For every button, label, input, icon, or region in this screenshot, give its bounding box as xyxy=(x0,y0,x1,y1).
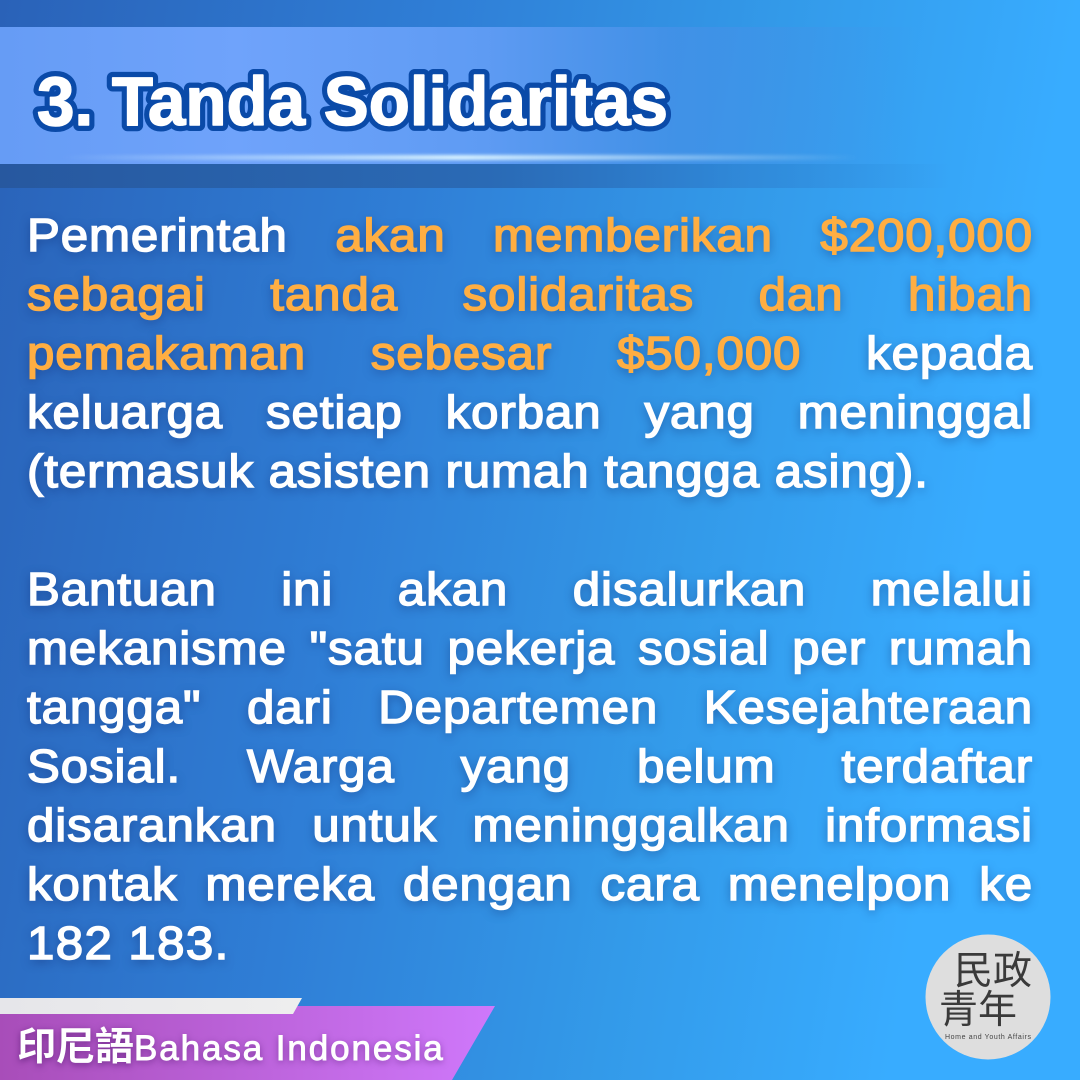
logo badge: Home and Youth Affairs xyxy=(945,1034,1032,1041)
body paragraph 2: Bantuan ini akan disalurkan melalui xyxy=(27,563,1033,615)
body paragraph 2: kontak mereka dengan cara menelpon ke xyxy=(27,858,1033,910)
logo badge: 民政 xyxy=(954,940,1032,996)
body paragraph 1: (termasuk asisten rumah tangga asing). xyxy=(27,445,929,497)
body paragraph 1: sebagai tanda solidaritas dan hibah xyxy=(27,268,1033,320)
title: 3. Tanda Solidaritas xyxy=(37,63,668,140)
body paragraph 2 xyxy=(26,563,1034,969)
body paragraph 2: tangga" dari Departemen Kesejahteraan xyxy=(27,681,1033,733)
body paragraph 2: mekanisme "satu pekerja sosial per rumah xyxy=(27,622,1033,674)
language tag xyxy=(0,998,495,1080)
body paragraph 1: pemakaman sebesar $50,000 kepada xyxy=(27,327,1033,379)
logo badge: 青年 xyxy=(939,979,1017,1035)
body paragraph 2: Sosial. Warga yang belum terdaftar xyxy=(27,740,1033,792)
body paragraph 1: keluarga setiap korban yang meninggal xyxy=(27,386,1033,438)
title banner xyxy=(0,27,870,188)
body paragraph 1 xyxy=(26,209,1036,504)
body paragraph 2: 182 183. xyxy=(27,917,230,969)
language tag: 印尼語Bahasa Indonesia xyxy=(17,1026,445,1069)
body paragraph 2: disarankan untuk meninggalkan informasi xyxy=(27,799,1033,851)
logo badge xyxy=(926,934,1050,1060)
body paragraph 1: Pemerintah akan memberikan $200,000 xyxy=(27,209,1033,261)
title: 3. Tanda Solidaritas xyxy=(37,63,668,140)
